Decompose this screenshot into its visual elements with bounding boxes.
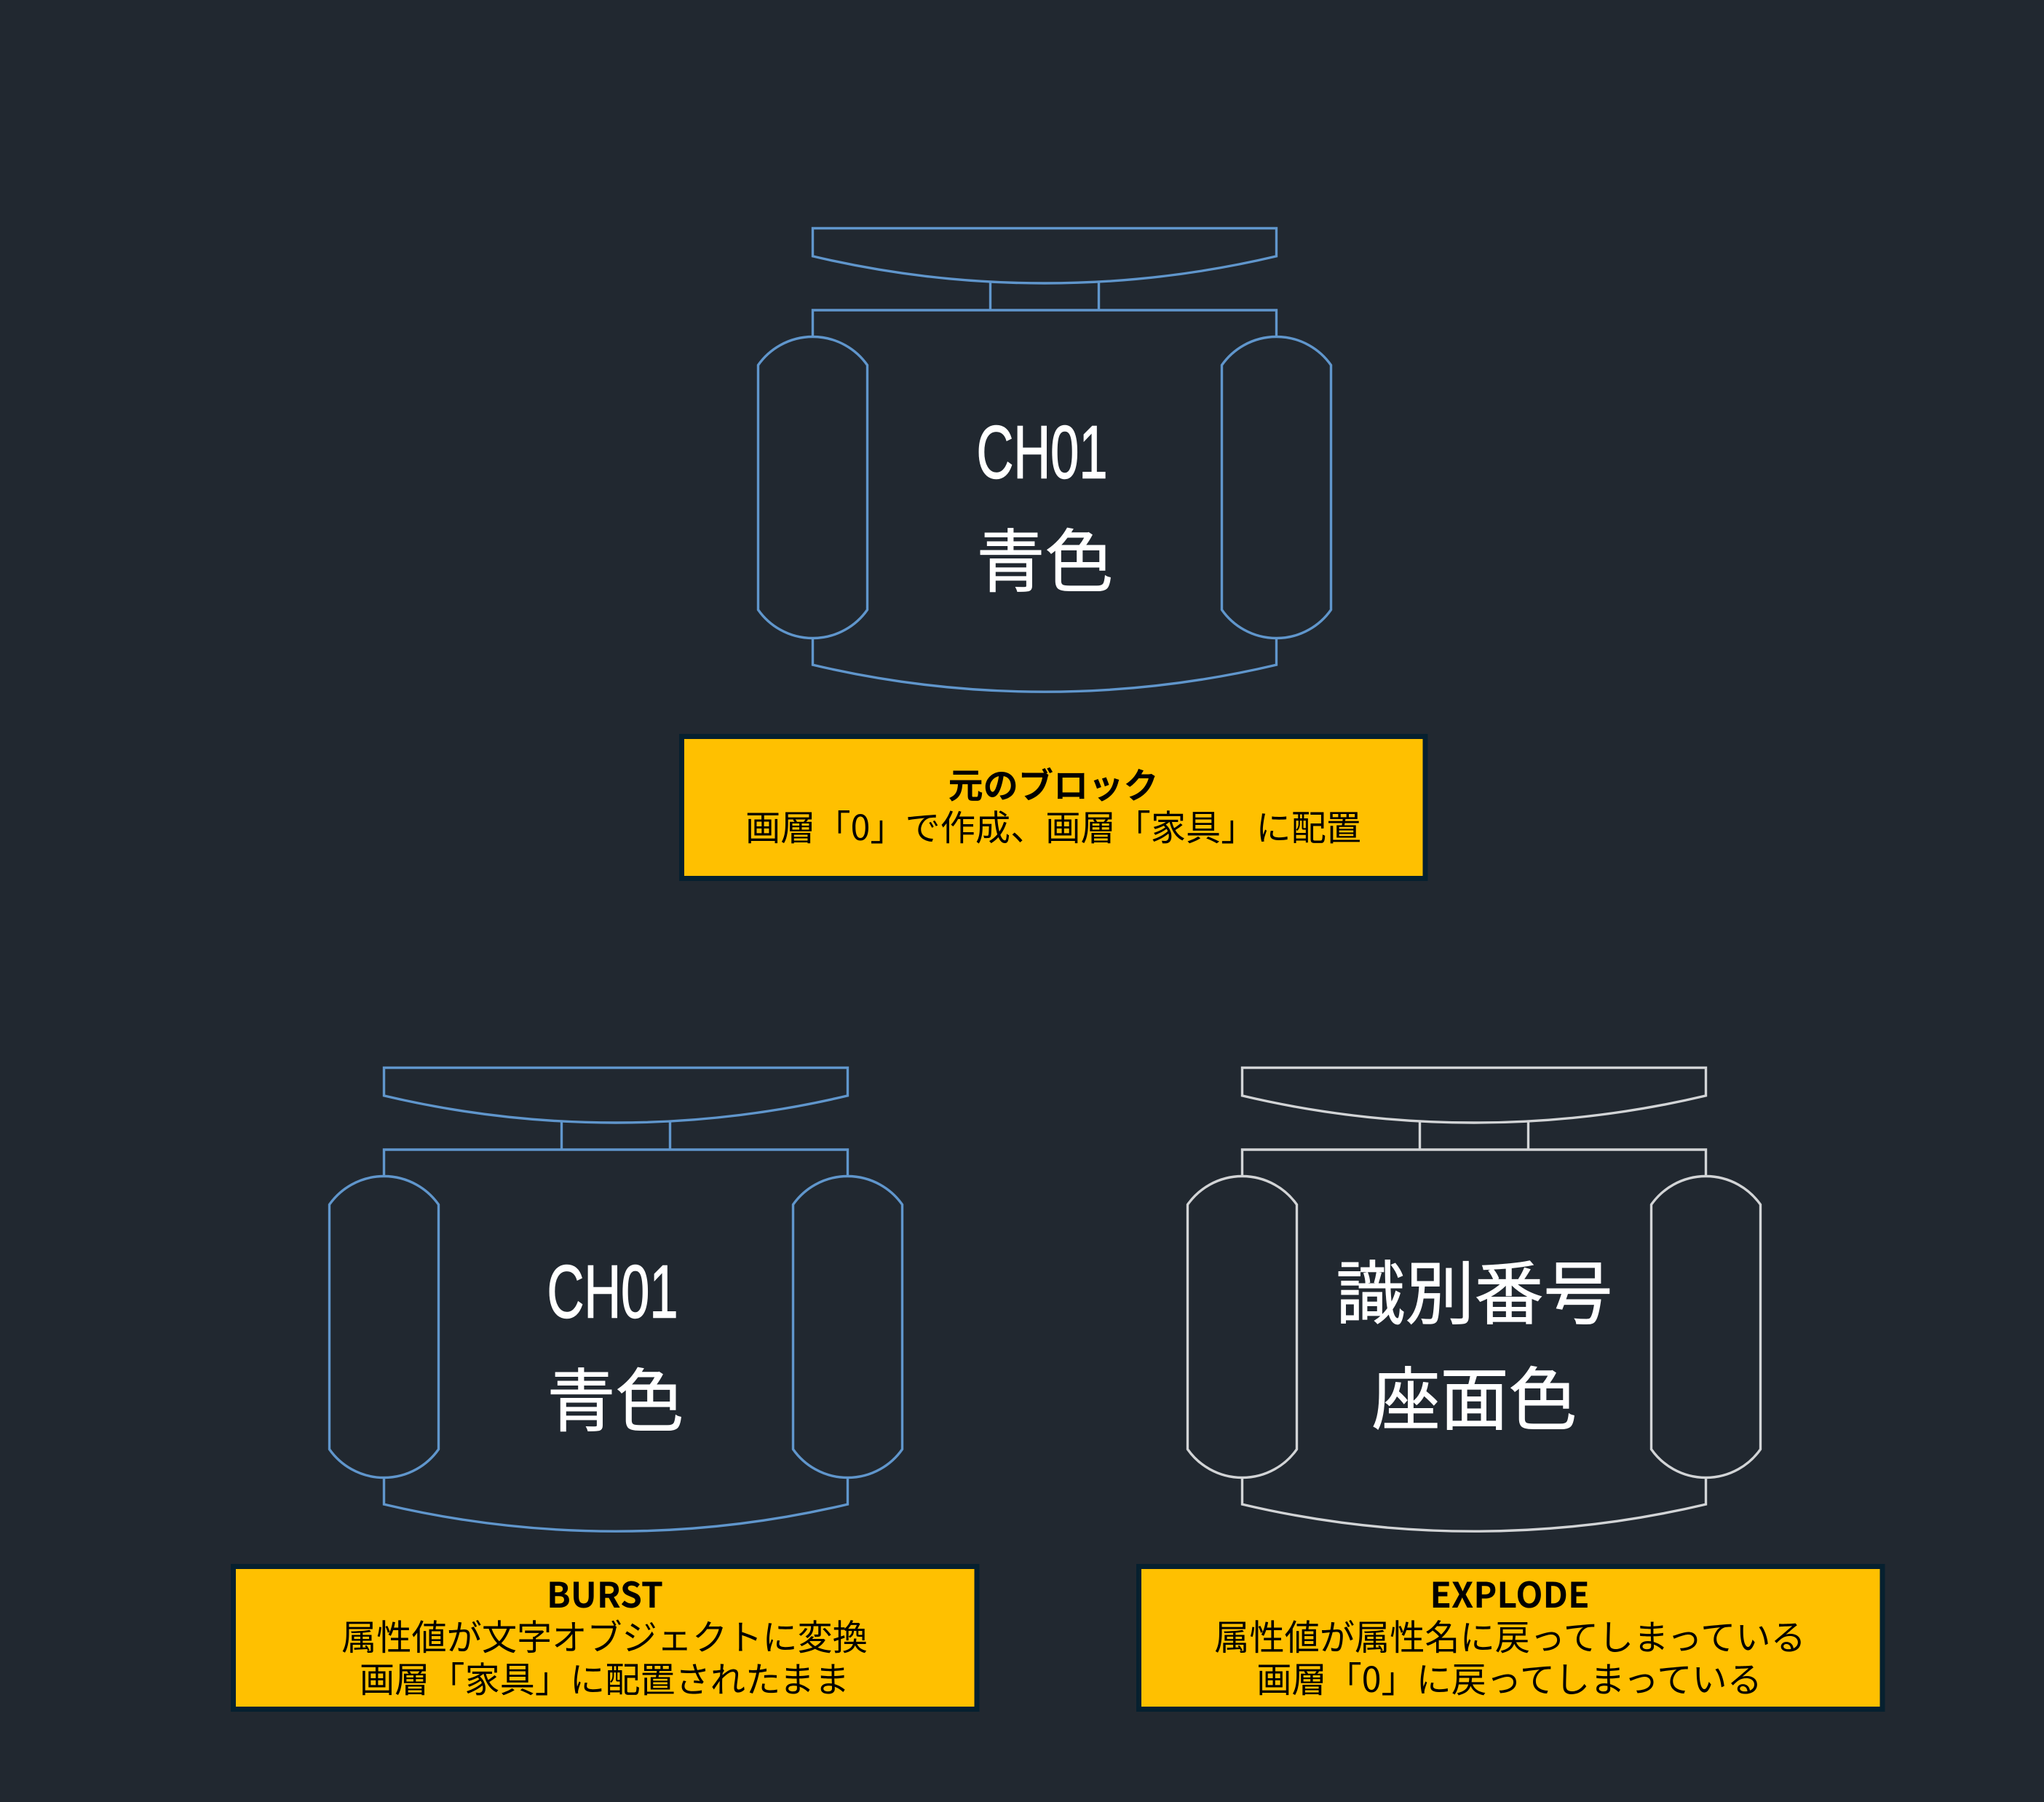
callout heading: EXPLODE xyxy=(1430,1567,1590,1618)
chair outline: blue xyxy=(758,229,1331,692)
callout heading: BURST xyxy=(547,1567,663,1618)
attribute text: CH01: CH01 xyxy=(977,411,1108,494)
callout: burst xyxy=(233,1567,977,1710)
panel: burst chair xyxy=(329,1067,903,1531)
callout: original block xyxy=(681,737,1425,878)
text: 青色: 青色 xyxy=(547,1347,684,1446)
panel: explode chair xyxy=(1188,1067,1760,1531)
attribute text: 青色: 青色 xyxy=(976,507,1114,606)
chair outline: blue xyxy=(329,1067,903,1531)
callout line one: 属性値が属性名に戻ってしまっている xyxy=(1214,1609,1806,1660)
callout line two: 画層「家具」に配置されたまま xyxy=(360,1651,849,1702)
callout line two: 画層「0」に戻ってしまっている xyxy=(1256,1651,1762,1702)
chair outline: white xyxy=(1188,1067,1760,1531)
callout description: 画層「0」で作成、画層「家具」に配置 xyxy=(745,799,1361,850)
callout line one: 属性値が文字オブジェクトに変換 xyxy=(341,1609,868,1660)
attribute name: 識別番号: 識別番号 xyxy=(1336,1239,1613,1338)
text: CH01: CH01 xyxy=(547,1249,678,1334)
attribute name: 座面色: 座面色 xyxy=(1371,1345,1577,1445)
callout: explode xyxy=(1138,1567,1882,1710)
callout heading: 元のブロック xyxy=(948,757,1159,808)
panel: original block chair xyxy=(758,229,1331,692)
